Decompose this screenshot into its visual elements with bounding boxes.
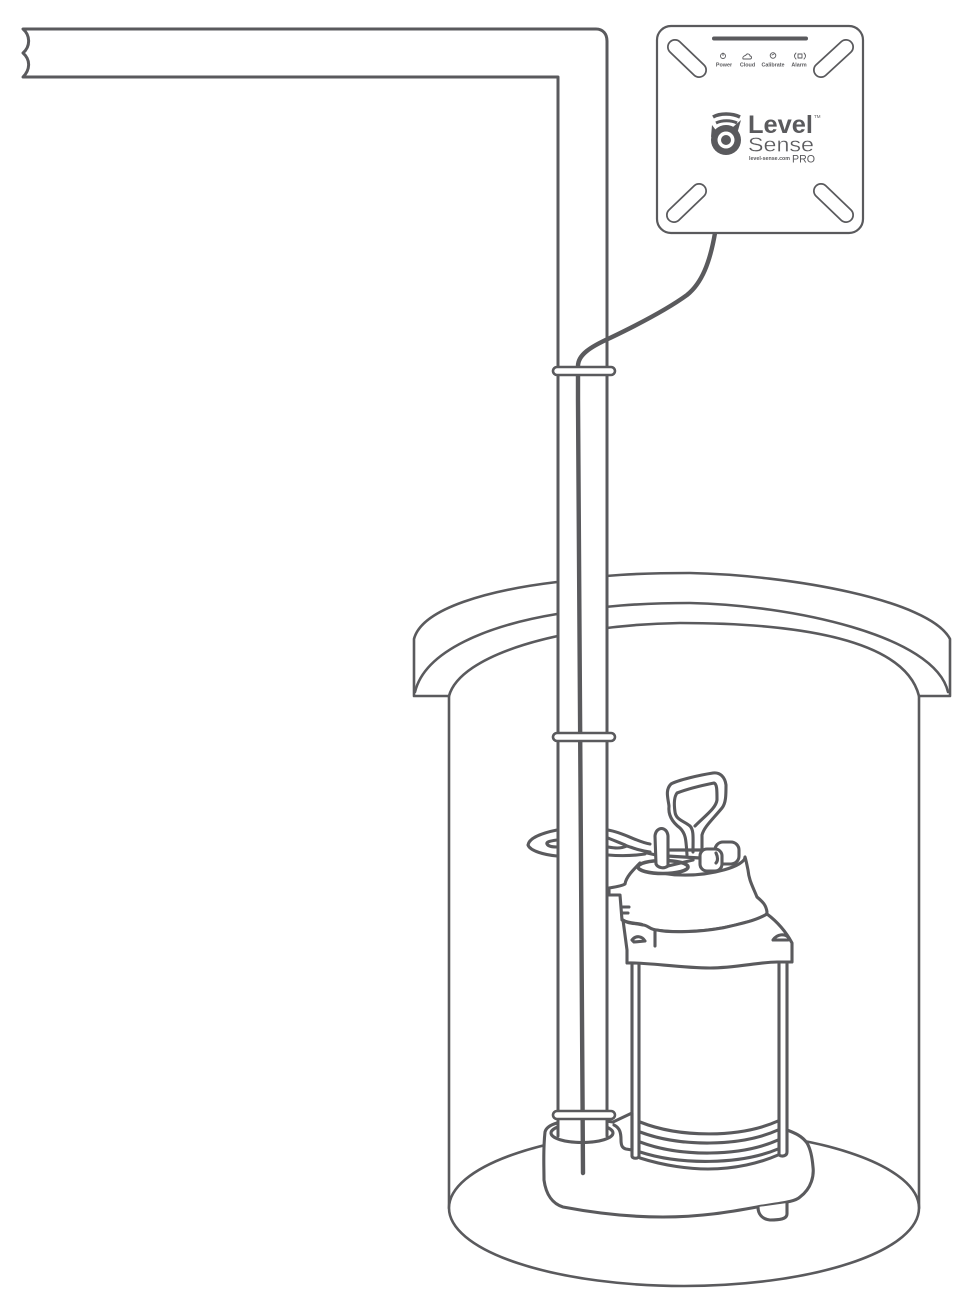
- pump base fill: [544, 1113, 813, 1217]
- handle: [667, 773, 726, 855]
- PRO mark: PRO: [792, 154, 815, 166]
- sump basin: [414, 573, 950, 1286]
- motor cylinder: [640, 963, 778, 1169]
- support rods: [632, 963, 787, 1158]
- top plate: [638, 860, 688, 874]
- sensor cable: [578, 233, 715, 1173]
- trademark: TM: [814, 114, 821, 119]
- pump base outline: [544, 1120, 813, 1217]
- status icons: [720, 53, 806, 59]
- Level Sense logo: [711, 111, 821, 166]
- float post: [655, 828, 668, 868]
- discharge port ring: [551, 1124, 613, 1142]
- pump foot: [758, 1203, 787, 1220]
- status labels: Calibrate: [761, 62, 785, 68]
- discharge pipe: [22, 29, 607, 1137]
- cylinder bottom edge: [640, 1155, 778, 1169]
- website: level-sense.com: [749, 156, 791, 162]
- status light bar: [714, 36, 806, 40]
- device body: [657, 26, 863, 233]
- status labels: Power: [716, 62, 733, 68]
- wordmark Level: Level: [748, 111, 813, 139]
- submersible pump: [528, 773, 813, 1220]
- status labels: [716, 62, 807, 68]
- status labels: Cloud: [740, 62, 755, 68]
- status labels: Alarm: [791, 62, 807, 68]
- wordmark Sense: Sense: [748, 134, 814, 156]
- side fin right: [608, 830, 650, 856]
- logo icon: [711, 114, 741, 155]
- monitor device: [657, 26, 863, 233]
- cylinder bands: [640, 1121, 778, 1161]
- float switch caps: [715, 842, 739, 864]
- volute neck: [613, 1113, 632, 1150]
- collar: [623, 914, 792, 968]
- mounting slots: [674, 47, 846, 215]
- motor housing: [609, 857, 767, 932]
- pipe clamps: [553, 367, 615, 1119]
- collar details: [622, 907, 789, 946]
- side fin left: [528, 830, 557, 856]
